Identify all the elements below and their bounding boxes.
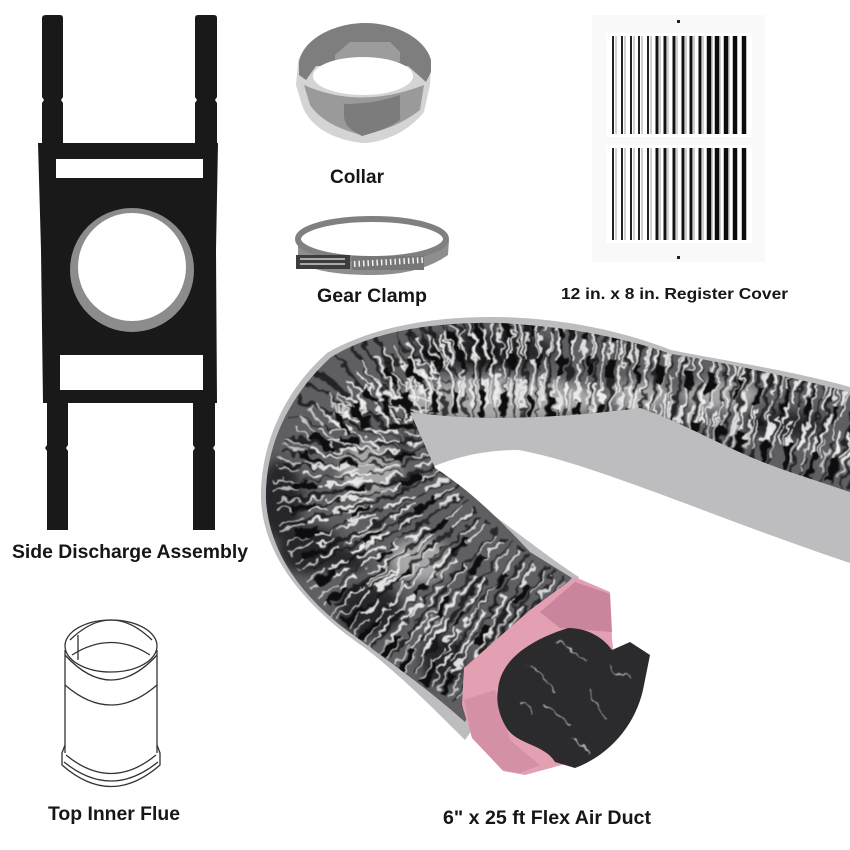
icon: side discharge assembly: [38, 15, 218, 530]
icon: gear clamp: [296, 219, 449, 275]
icon: register cover: [592, 15, 765, 262]
label: gear clamp: Gear Clamp: [317, 286, 427, 307]
label: flex air duct: 6" x 25 ft Flex Air Duct: [443, 808, 652, 829]
pink insulation ring: [462, 577, 620, 775]
label: register cover: 12 in. x 8 in. Register Cover: [561, 286, 788, 303]
icon: flex air duct: [240, 300, 850, 775]
label: collar: Collar: [330, 167, 385, 188]
black inner duct end: [497, 628, 650, 768]
icon: top inner flue: [62, 620, 160, 786]
label: side discharge assembly: Side Discharge Assembly: [12, 542, 248, 563]
label: top inner flue: Top Inner Flue: [48, 804, 180, 825]
icon: collar: [296, 23, 431, 143]
